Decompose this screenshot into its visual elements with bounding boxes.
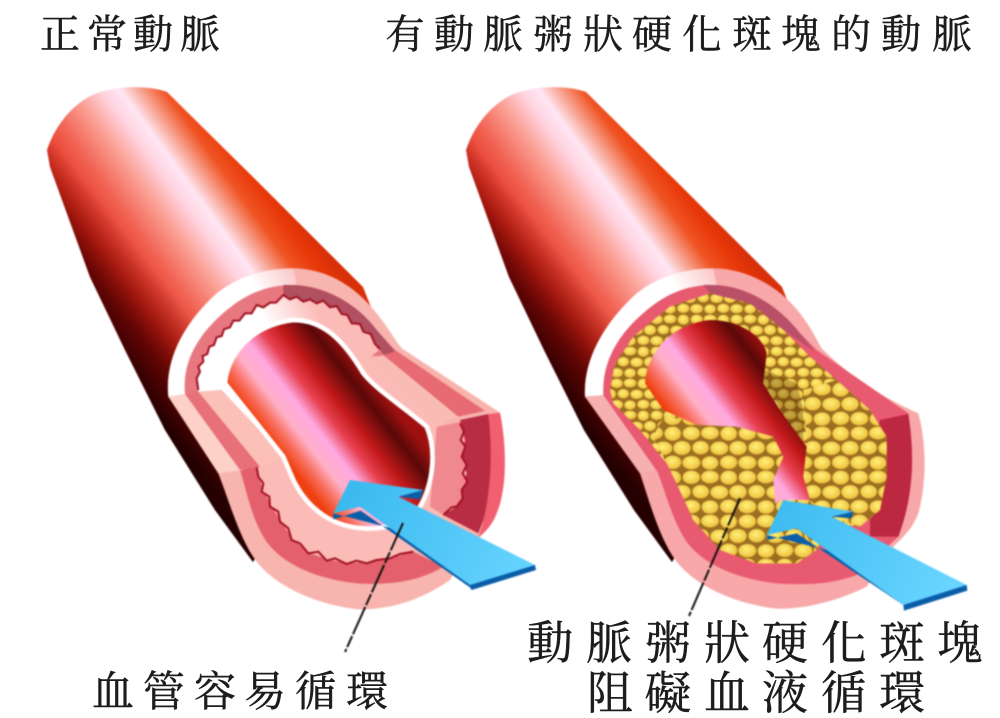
right intima face bbox=[430, 422, 467, 515]
dark shading on lower tube bbox=[47, 87, 380, 562]
heading: artery with plaque: 有動脈粥狀硬化斑塊的動脈 bbox=[385, 12, 972, 57]
lower left cut face outer bbox=[168, 394, 243, 473]
cross-section of plaque artery bbox=[585, 268, 925, 609]
heading: normal artery: 正常動脈 bbox=[40, 12, 220, 57]
wavy membrane line upper bbox=[197, 295, 380, 390]
plaque shadow bbox=[763, 370, 803, 443]
intima layer bbox=[197, 295, 467, 564]
lower left cut face red layer bbox=[185, 392, 260, 470]
plaque large cells lower lobe bbox=[653, 417, 817, 563]
shaded upper wall bbox=[283, 285, 395, 355]
artery: normal bbox=[47, 87, 536, 652]
outer tube of normal artery bbox=[47, 87, 380, 562]
outer wall bbox=[585, 268, 925, 609]
middle wall layer bbox=[185, 285, 397, 394]
wavy membrane line lower bbox=[257, 467, 413, 564]
leader line, plaque artery bbox=[689, 498, 740, 616]
inner wall crimson far side bbox=[443, 414, 492, 533]
plaque large cells right lobe bbox=[803, 380, 887, 527]
dark shading on lower tube bbox=[466, 87, 799, 562]
lower left cut face bbox=[585, 395, 660, 473]
wavy membrane line right bbox=[443, 423, 467, 515]
shaded upper wall bbox=[703, 285, 815, 352]
outer wall highlight bbox=[168, 268, 297, 397]
lumen bbox=[225, 320, 432, 529]
leader line, normal artery bbox=[345, 523, 403, 652]
label: plaque line two: 阻礙血液循環 bbox=[587, 668, 925, 718]
cross-section of normal artery bbox=[168, 268, 505, 609]
lower left cut face inner bbox=[198, 390, 283, 467]
outer tube of plaque artery bbox=[466, 87, 799, 562]
blue flow arrow, normal artery bbox=[333, 480, 536, 590]
outer wall bbox=[168, 268, 505, 609]
right wall edge bbox=[478, 413, 505, 537]
middle wall red layer bbox=[603, 285, 912, 584]
upper right cut face outer layer bbox=[397, 349, 500, 413]
upper right cut face red layer bbox=[383, 351, 487, 417]
label: blood flows easily: 血管容易循環 bbox=[92, 670, 388, 716]
lower middle wall layer bbox=[240, 467, 443, 584]
artery: with plaque bbox=[466, 87, 967, 616]
outer wall highlight bbox=[585, 268, 717, 397]
lumen narrowed by plaque bbox=[645, 320, 810, 503]
label: plaque line one: 動脈粥狀硬化斑塊 bbox=[527, 618, 983, 669]
upper right cut face bbox=[367, 355, 458, 425]
plaque base cells bbox=[610, 293, 887, 563]
crimson far wall bbox=[870, 414, 912, 537]
blue flow arrow, plaque artery bbox=[767, 500, 967, 611]
